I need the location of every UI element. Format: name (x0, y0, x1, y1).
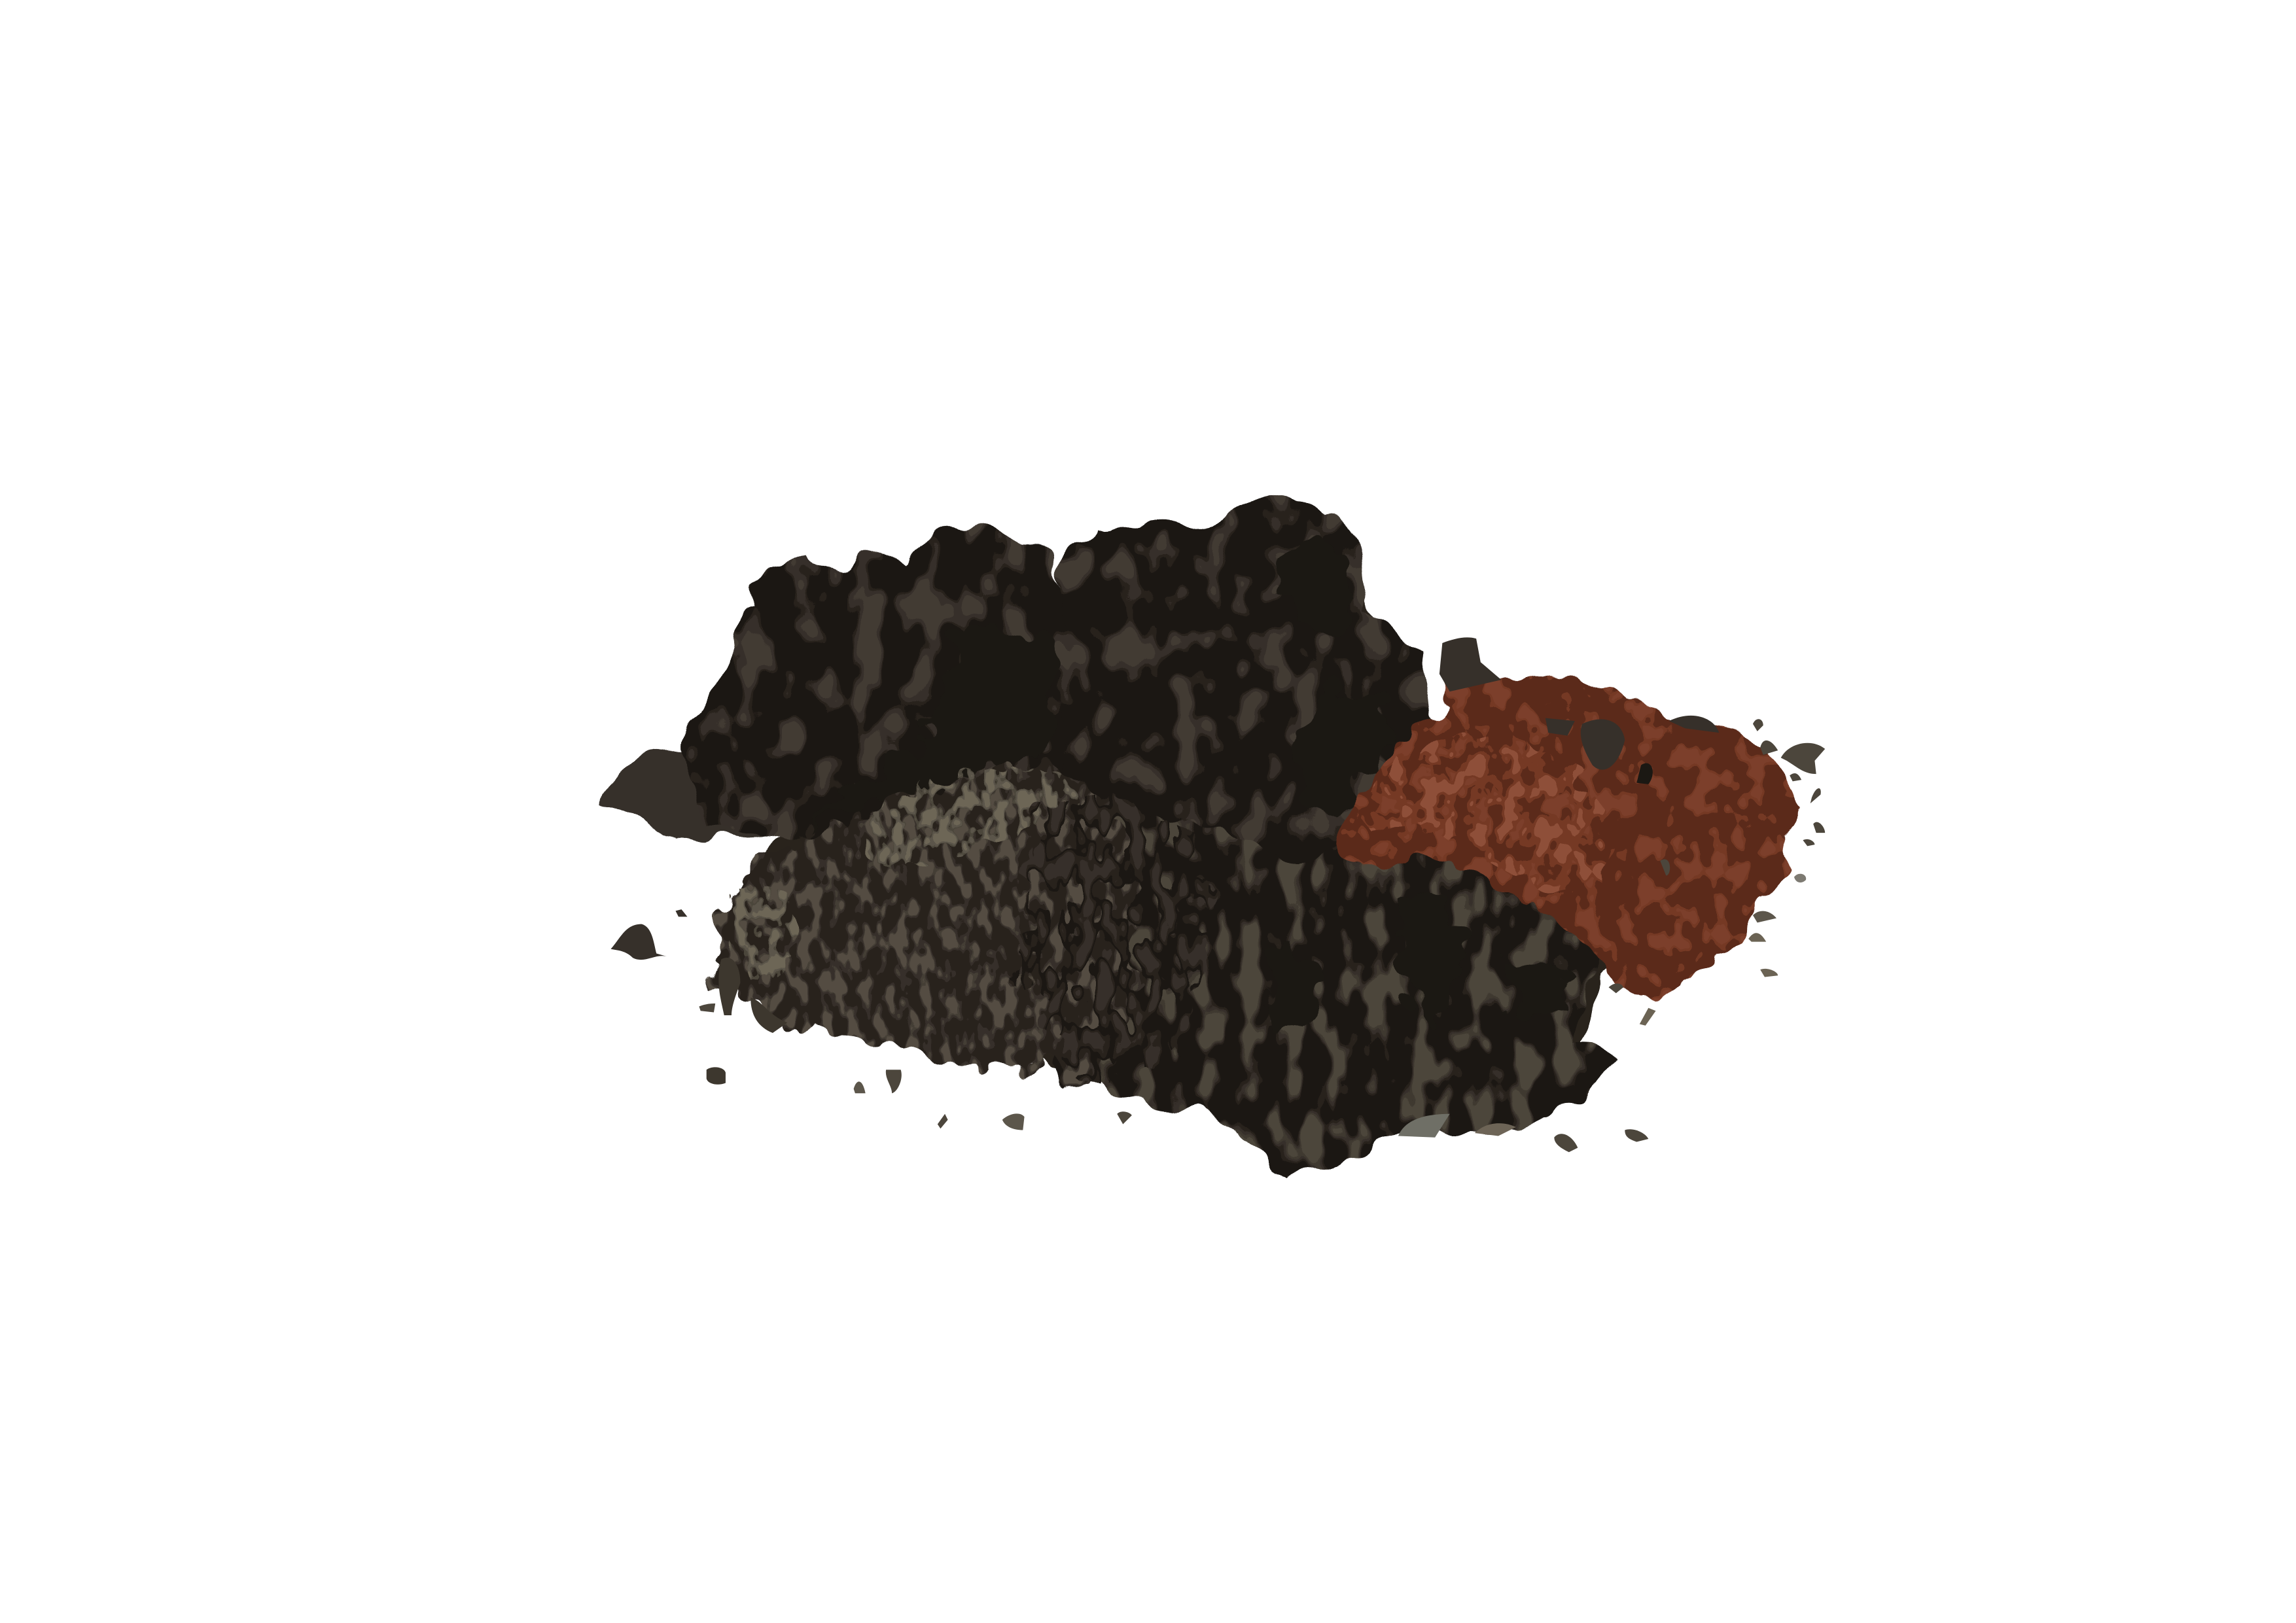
pale grey edge on bottom of pile (1398, 1114, 1516, 1138)
soil crumbs, right side (1439, 637, 1825, 1026)
lower right dark soil pile (1052, 817, 1616, 1177)
back right mound (1060, 497, 1432, 883)
dark blend between the two lower piles (1025, 797, 1211, 1074)
dark spots in red pile (1545, 716, 1719, 875)
lighter left part of red pile (1357, 737, 1612, 894)
lighter speckled highlights on lower left pile (730, 767, 1082, 986)
solid base under all dark piles (743, 589, 1612, 1133)
dark shadows on lower right pile (1269, 899, 1568, 1022)
drips at left edge of lower pile (718, 958, 787, 1033)
left tail of the back mound (603, 751, 795, 842)
lower left fine soil pile (714, 769, 1140, 1086)
back left mound (684, 525, 1078, 839)
red soil pile, dark base (1332, 676, 1801, 998)
solid shadow of back mounds (802, 540, 1398, 824)
soil crumbs, left and bottom (610, 909, 1648, 1152)
